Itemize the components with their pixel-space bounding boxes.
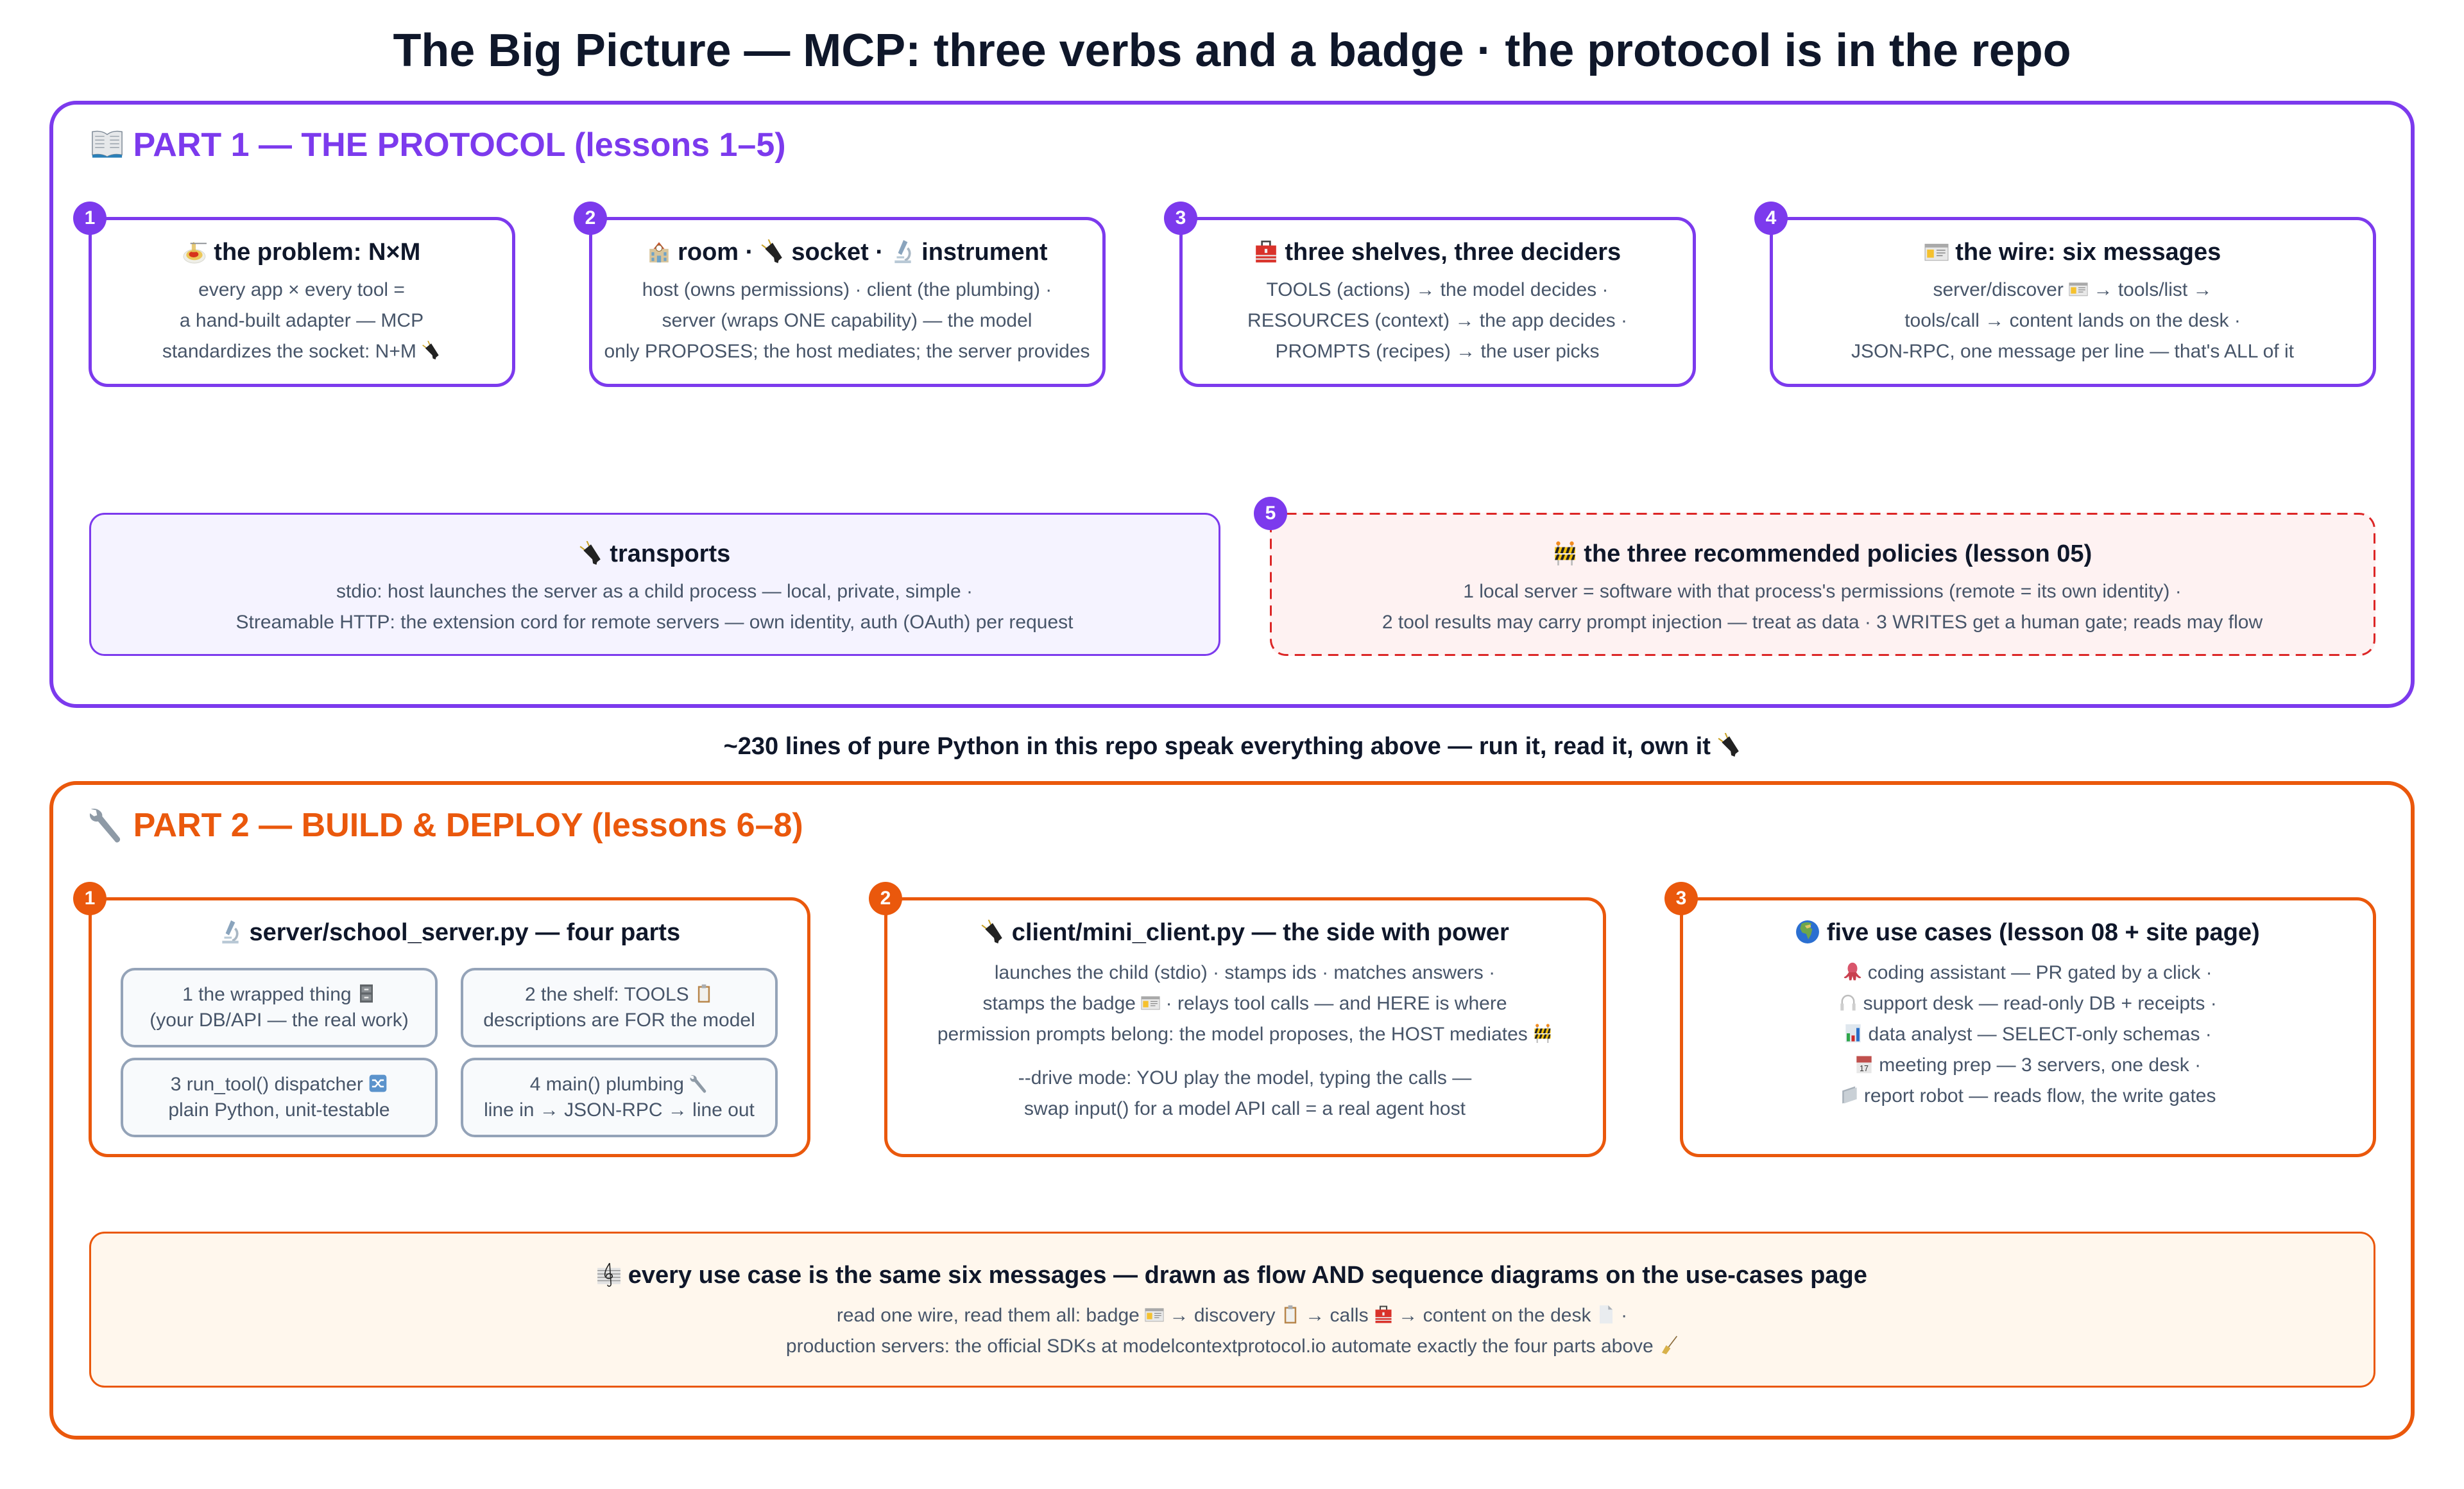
icon: microscope bbox=[894, 240, 911, 263]
card heading: the three recommended policies (lesson 05) bbox=[1584, 540, 2092, 567]
badge 1 bbox=[73, 882, 107, 915]
card heading: client/mini_client.py — the side with power bbox=[1012, 919, 1509, 946]
card body: every app × every tool = bbox=[198, 279, 405, 300]
badge 2 bbox=[869, 882, 902, 915]
part text bbox=[483, 984, 755, 1031]
icon: toolbox bbox=[1374, 1305, 1393, 1324]
card 3: five use cases bbox=[1680, 897, 2375, 1157]
callout body: read one wire, read them all: badge → discovery → calls → content on the desk · bbox=[837, 1305, 1627, 1326]
card heading: the wire: six messages bbox=[1955, 239, 2221, 266]
icon: page bbox=[1596, 1305, 1616, 1324]
card body: only PROPOSES; the host mediates; the server provides bbox=[604, 341, 1090, 362]
card 3: three shelves bbox=[1179, 217, 1695, 386]
icon: shuffle bbox=[370, 1074, 386, 1092]
callout body: production servers: the official SDKs at modelcontextprotocol.io automate exactly the four parts above bbox=[786, 1336, 1654, 1357]
card body: host (owns permissions) · client (the plumbing) · bbox=[642, 279, 1052, 300]
card body: stdio: host launches the server as a child process — local, private, simple · bbox=[336, 581, 973, 602]
part text bbox=[150, 984, 409, 1031]
card body: launches the child (stdio) · stamps ids · matches answers · bbox=[995, 962, 1495, 983]
card 4: the wire bbox=[1770, 217, 2375, 386]
icon: id card bbox=[1141, 993, 1160, 1012]
part text: 2 the shelf: TOOLS bbox=[525, 984, 689, 1005]
icon: microscope bbox=[222, 920, 239, 943]
card 1: the problem bbox=[89, 217, 515, 386]
drive mode note: --drive mode: YOU play the model, typing the calls — bbox=[1018, 1067, 1471, 1089]
icon: calendar bbox=[1854, 1054, 1874, 1074]
icon: plug bbox=[580, 541, 601, 565]
part text: (your DB/API — the real work) bbox=[150, 1010, 409, 1031]
card body: TOOLS (actions) → the model decides · bbox=[1267, 279, 1608, 300]
card 5: recommended policies bbox=[1269, 512, 2375, 656]
card body: server/discover → tools/list → bbox=[1933, 279, 2212, 300]
card body bbox=[887, 958, 1603, 1050]
card body: stamps the badge · relays tool calls — and HERE is where bbox=[982, 993, 1507, 1014]
badge 4 bbox=[1754, 202, 1788, 235]
card 2: mini client bbox=[884, 897, 1605, 1157]
part box 3 bbox=[121, 1058, 438, 1137]
panel: part 1 the protocol bbox=[49, 101, 2415, 708]
card body: a hand-built adapter — MCP bbox=[180, 310, 424, 331]
part text: descriptions are FOR the model bbox=[483, 1010, 755, 1031]
badge 2 bbox=[574, 202, 607, 235]
card body bbox=[235, 581, 1073, 633]
title: The Big Picture — MCP: three verbs and a badge · the protocol is in the repo bbox=[393, 25, 2071, 76]
badge 1: 1 bbox=[85, 888, 95, 909]
card body: RESOURCES (context) → the app decides · bbox=[1247, 310, 1627, 331]
use case list: report robot — reads flow, the write gates bbox=[1864, 1085, 2216, 1106]
icon: bar chart bbox=[1844, 1024, 1863, 1043]
card body: 2 tool results may carry prompt injection — treat as data · 3 WRITES get a human gate; reads may flow bbox=[1382, 612, 2263, 633]
use case list: coding assistant — PR gated by a click · bbox=[1868, 962, 2212, 983]
icon: wrench bbox=[690, 1075, 706, 1093]
part text bbox=[484, 1074, 755, 1121]
callout: same six messages bbox=[89, 1231, 2375, 1388]
part box 4 bbox=[461, 1058, 778, 1137]
card body bbox=[1382, 581, 2263, 633]
icon: octopus bbox=[1843, 962, 1862, 981]
icon: clipboard bbox=[1281, 1305, 1300, 1324]
card heading: room · socket · instrument bbox=[678, 239, 1047, 266]
part box 1 bbox=[121, 968, 438, 1047]
card body: Streamable HTTP: the extension cord for remote servers — own identity, auth (OAuth) per request bbox=[235, 612, 1073, 633]
icon: file cabinet bbox=[360, 985, 373, 1003]
heading: part 1: PART 1 — THE PROTOCOL (lessons 1–5) bbox=[133, 126, 786, 164]
panel: part 2 build and deploy bbox=[49, 781, 2415, 1440]
icon: id card bbox=[1145, 1305, 1164, 1324]
use case list: support desk — read-only DB + receipts · bbox=[1863, 993, 2217, 1014]
card body: permission prompts belong: the model proposes, the HOST mediates bbox=[937, 1024, 1528, 1045]
card body bbox=[162, 279, 439, 362]
card: transports bbox=[89, 512, 1220, 656]
card heading: three shelves, three deciders bbox=[1285, 239, 1621, 266]
connector statement: ~230 lines of pure Python in this repo speak everything above — run it, read it, own it bbox=[724, 733, 1711, 760]
badge 3: 3 bbox=[1176, 207, 1186, 228]
card 2: room socket instrument bbox=[589, 217, 1105, 386]
icon: globe bbox=[1795, 920, 1820, 944]
card body: JSON-RPC, one message per line — that's ALL of it bbox=[1851, 341, 2294, 362]
badge 1 bbox=[73, 202, 107, 235]
card body: standardizes the socket: N+M bbox=[162, 341, 416, 362]
icon: construction barrier bbox=[1533, 1024, 1552, 1043]
callout heading: every use case is the same six messages — drawn as flow AND sequence diagrams on the use-cases page bbox=[628, 1262, 1867, 1289]
icon: headphones bbox=[1838, 993, 1858, 1012]
badge 2: 2 bbox=[585, 207, 595, 228]
part box 2 bbox=[461, 968, 778, 1047]
icon: id card bbox=[1925, 244, 1948, 261]
card 1: school server bbox=[89, 897, 810, 1157]
badge 5: 5 bbox=[1265, 503, 1276, 524]
badge 3: 3 bbox=[1676, 888, 1686, 909]
badge 3 bbox=[1164, 202, 1197, 235]
drive mode note: swap input() for a model API call = a real agent host bbox=[1024, 1098, 1466, 1119]
icon: plug bbox=[422, 341, 439, 359]
icon: id card bbox=[2069, 282, 2088, 297]
badge 1: 1 bbox=[85, 207, 95, 228]
use case list: meeting prep — 3 servers, one desk · bbox=[1879, 1054, 2201, 1076]
use case list bbox=[1682, 958, 2373, 1112]
part text: 1 the wrapped thing bbox=[182, 984, 352, 1005]
card heading bbox=[1682, 917, 2373, 949]
icon: school bbox=[649, 242, 669, 263]
callout body bbox=[91, 1300, 2373, 1362]
part text: 3 run_tool() dispatcher bbox=[171, 1074, 363, 1095]
icon: musical score bbox=[597, 1262, 621, 1287]
card heading: server/school_server.py — four parts bbox=[249, 919, 680, 946]
icon: broom bbox=[1659, 1336, 1678, 1355]
icon: plug bbox=[1718, 733, 1739, 757]
icon: clipboard bbox=[698, 985, 710, 1003]
card body bbox=[604, 279, 1090, 362]
icon: toolbox bbox=[1256, 240, 1276, 263]
part text: 4 main() plumbing bbox=[530, 1074, 684, 1095]
card heading: five use cases (lesson 08 + site page) bbox=[1827, 919, 2260, 946]
card heading: transports bbox=[610, 540, 730, 567]
icon: spaghetti bbox=[184, 242, 207, 263]
card body: PROMPTS (recipes) → the user picks bbox=[1275, 341, 1600, 362]
icon: folder bbox=[1840, 1085, 1859, 1105]
card body bbox=[1247, 279, 1627, 362]
part text: line in → JSON-RPC → line out bbox=[484, 1099, 755, 1121]
drive mode note bbox=[887, 1063, 1603, 1124]
part text: plain Python, unit-testable bbox=[168, 1099, 390, 1121]
icon: wrench bbox=[90, 809, 121, 843]
icon: open book bbox=[92, 131, 123, 158]
card body: 1 local server = software with that process's permissions (remote = its own identity) · bbox=[1463, 581, 2182, 602]
callout heading bbox=[91, 1259, 2373, 1291]
icon: calendar: 17 bbox=[1860, 1064, 1869, 1073]
card heading: the problem: N×M bbox=[214, 239, 420, 266]
icon: construction barrier bbox=[1555, 542, 1575, 565]
badge 5 bbox=[1254, 497, 1287, 530]
badge 2: 2 bbox=[880, 888, 891, 909]
card body bbox=[1851, 279, 2294, 362]
card body: server (wraps ONE capability) — the model bbox=[662, 310, 1032, 331]
badge 4: 4 bbox=[1766, 207, 1776, 228]
use case list: data analyst — SELECT-only schemas · bbox=[1869, 1024, 2212, 1045]
heading: part 2: PART 2 — BUILD & DEPLOY (lessons 6–8) bbox=[133, 807, 803, 844]
part text bbox=[168, 1074, 390, 1121]
card body: tools/call → content lands on the desk · bbox=[1904, 310, 2241, 331]
icon: plug bbox=[761, 239, 782, 263]
icon: plug bbox=[982, 920, 1002, 943]
badge 3 bbox=[1664, 882, 1698, 915]
